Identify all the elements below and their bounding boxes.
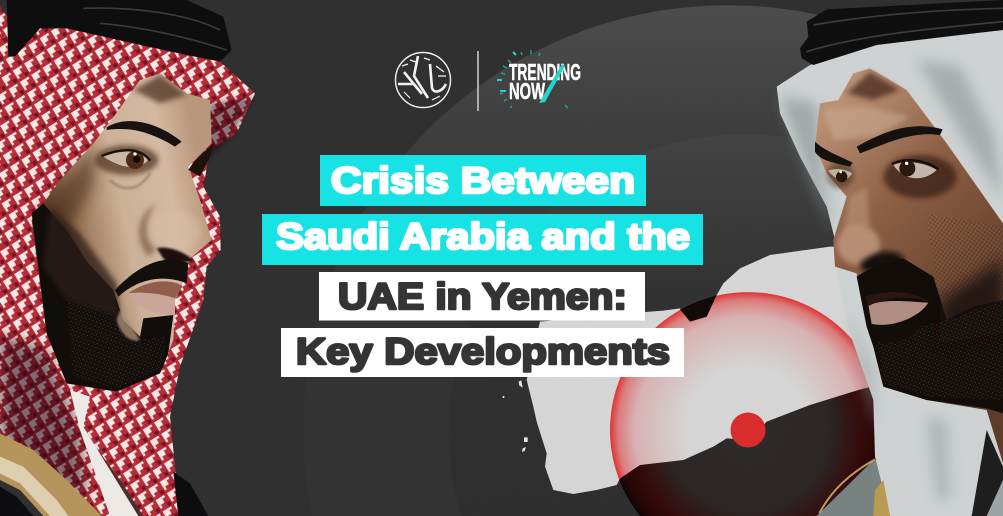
left black headband <box>7 0 232 62</box>
left beard <box>32 203 173 392</box>
lip line <box>865 292 930 306</box>
title line 2 box <box>262 214 703 265</box>
right eye socket <box>883 155 957 198</box>
left eye <box>102 150 150 169</box>
right headdress <box>777 30 1003 516</box>
now word: NOW <box>509 78 545 104</box>
far eye socket <box>827 162 853 188</box>
left eyebrow <box>107 121 182 147</box>
background circle: inner <box>449 134 1003 516</box>
dark notch <box>680 295 717 322</box>
title line 1: Crisis Between <box>331 160 635 201</box>
title line 3 box <box>319 272 645 320</box>
beard fade <box>940 260 1003 343</box>
near eye <box>892 160 938 178</box>
cheek texture <box>927 213 1003 367</box>
nose highlight <box>837 225 880 265</box>
left headdress <box>0 7 255 516</box>
portrait: right leader <box>777 0 1003 516</box>
right robe <box>817 460 900 516</box>
nostril <box>157 248 195 263</box>
lower lip beard <box>872 324 920 343</box>
gauge ticks <box>497 50 568 108</box>
dark robe right <box>972 430 1003 516</box>
title line 3: UAE in Yemen: <box>338 276 627 317</box>
nose bridge <box>843 187 870 233</box>
chin patch <box>117 310 140 341</box>
brand logo: calligraphy seal <box>396 52 450 108</box>
left mustache <box>115 260 188 297</box>
portrait: left leader <box>0 0 255 516</box>
far eye <box>828 169 852 182</box>
beard transition <box>43 207 120 317</box>
gold centre trim <box>873 480 890 516</box>
brand: Trending Now <box>497 50 581 108</box>
trending word: TRENDING <box>509 59 581 85</box>
title line 1 box <box>320 155 646 206</box>
left lower lip <box>128 293 175 315</box>
title line 4: Key Developments <box>296 331 670 372</box>
headdress shading <box>780 60 1003 500</box>
nose highlight <box>152 212 202 248</box>
title line 2: Saudi Arabia and the <box>276 216 690 257</box>
headdress shading <box>0 333 87 500</box>
right lower lip <box>868 301 928 325</box>
black robe <box>173 472 208 516</box>
right black headband <box>800 0 1003 65</box>
nose contour <box>139 203 157 257</box>
inner collar shadow <box>83 427 143 516</box>
far eye <box>188 145 213 177</box>
forehead shadow <box>847 72 900 100</box>
logo divider <box>477 51 479 111</box>
left face <box>32 73 212 392</box>
near eyebrow <box>857 126 943 153</box>
islands <box>503 380 528 452</box>
land mass <box>527 247 883 494</box>
under-eye crease <box>110 173 150 188</box>
right beard <box>857 258 1003 413</box>
background circle: outer <box>303 5 1003 516</box>
title <box>262 155 703 377</box>
gauge needle <box>539 64 565 103</box>
left eye socket <box>95 145 158 175</box>
headband highlights <box>807 8 1003 52</box>
white collar <box>70 390 140 516</box>
nostril <box>860 252 903 272</box>
far eyebrow <box>815 142 853 167</box>
gold braid <box>0 433 102 516</box>
beard texture <box>877 300 1003 400</box>
title line 4 box <box>281 328 684 377</box>
right face <box>815 68 1003 463</box>
red location dot <box>730 412 766 448</box>
map of Yemen <box>503 247 886 516</box>
forehead shadow <box>133 75 187 103</box>
forehead highlight <box>823 107 910 140</box>
gold trim <box>819 459 875 513</box>
left upper lip <box>128 281 183 298</box>
red glow on land <box>610 292 869 480</box>
target circle sea <box>610 292 886 516</box>
temple shadow <box>37 147 97 260</box>
beard texture <box>67 300 167 388</box>
